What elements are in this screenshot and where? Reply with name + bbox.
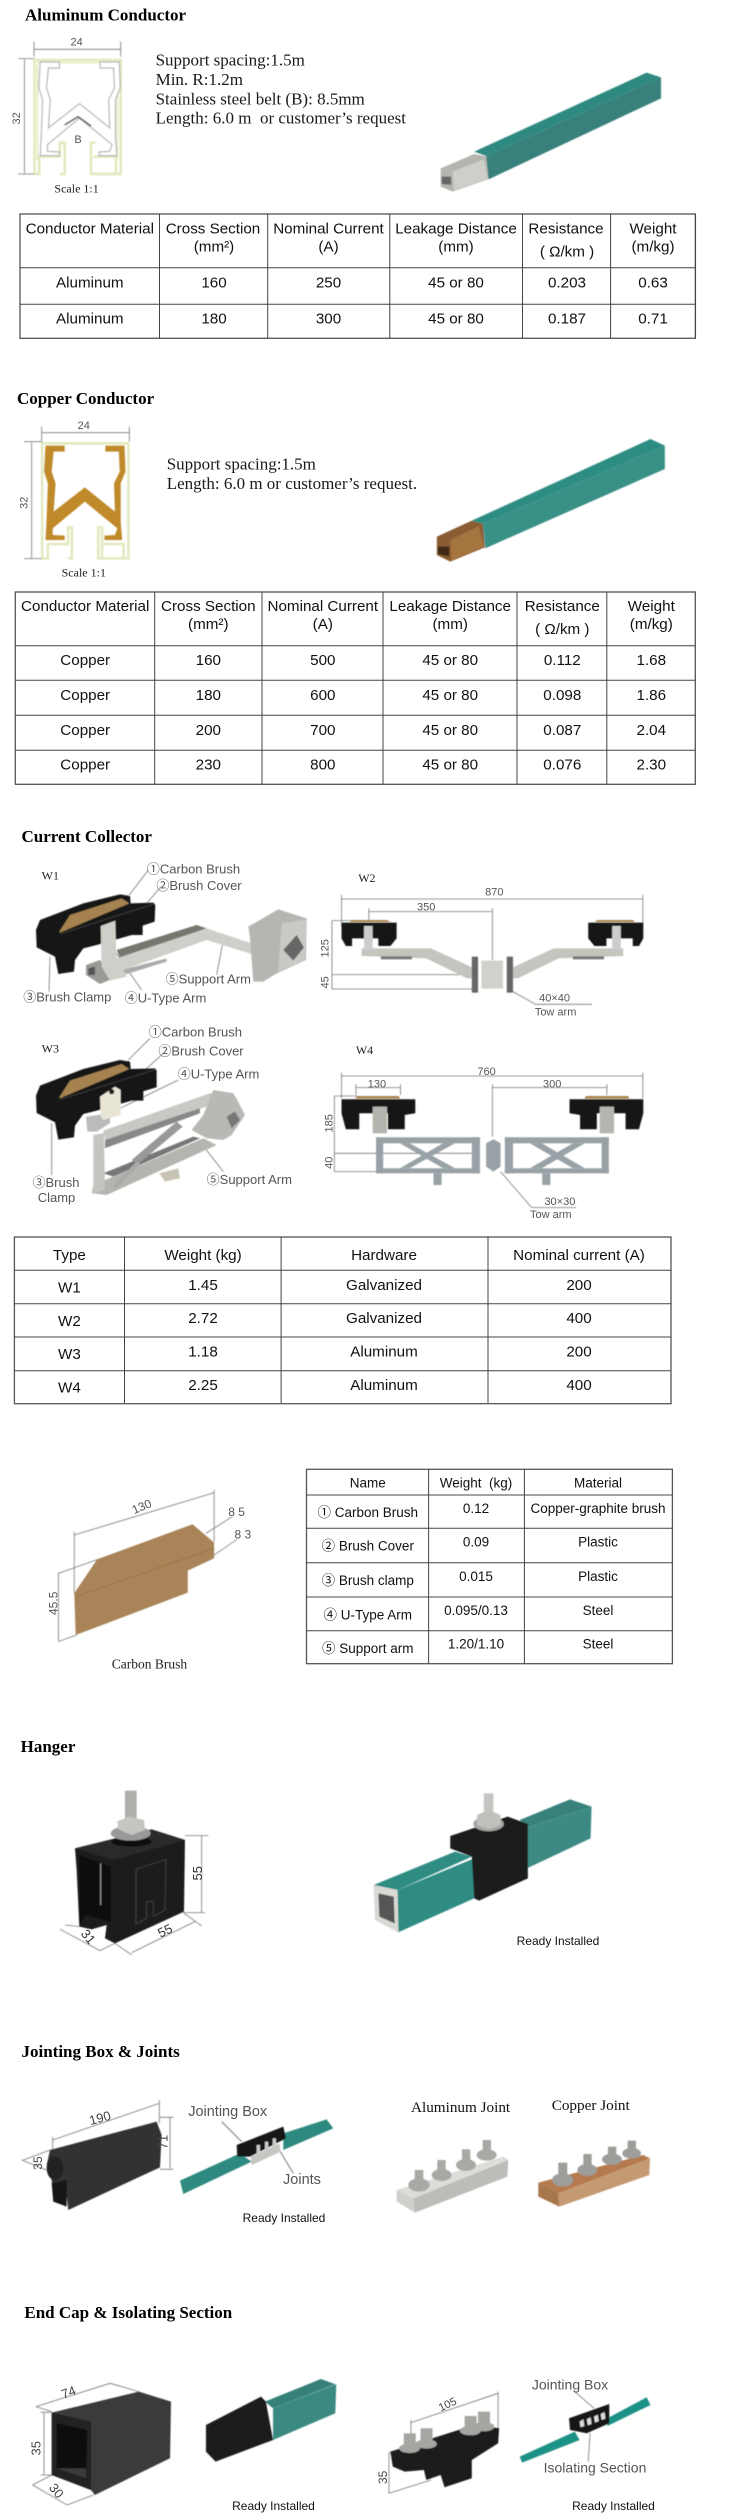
table: copper specifications: (mm) — [432, 616, 468, 633]
table: copper specifications: Copper — [60, 687, 110, 704]
table: copper specifications: 700 — [310, 722, 335, 739]
diagram: aluminum profile cross section: 24 — [70, 36, 83, 48]
table: aluminum specifications: (m/kg) — [631, 238, 675, 256]
table: collector types: W4 — [58, 1380, 81, 1396]
diagram: W1 collector: W1 — [42, 869, 59, 883]
image: isolating section installed: Isolating Section — [544, 2460, 646, 2476]
table: aluminum specifications: 300 — [316, 310, 341, 328]
table: collector types: W3 — [58, 1346, 81, 1363]
diagram: jointing box dimensions: 35 — [31, 2156, 45, 2170]
table: copper specifications: Copper — [60, 722, 110, 739]
table: copper specifications: Copper — [60, 756, 110, 774]
diagram: isolating section dimensions: 35 — [376, 2470, 390, 2484]
table: copper specifications: 2.30 — [637, 756, 666, 774]
diagram: W1 collector: ①Carbon Brush — [147, 862, 240, 876]
table: aluminum specifications: (mm²) — [194, 238, 234, 256]
table: aluminum specifications: Aluminum — [56, 310, 124, 328]
image: isolating section installed — [520, 2377, 655, 2513]
spec text: aluminum conductor: Stainless steel belt (B): 8.5mm — [156, 89, 365, 108]
heading: current collector: Current Collector — [22, 827, 152, 846]
table: aluminum specifications: 0.71 — [638, 310, 668, 328]
diagram: W4 collector dimensions: W4 — [356, 1043, 373, 1057]
table: aluminum specifications: Conductor Material — [26, 220, 154, 238]
diagram: W3 collector: W3 — [42, 1042, 59, 1056]
diagram: carbon brush: 130 — [130, 1496, 154, 1517]
table: aluminum specifications: Aluminum — [56, 274, 124, 292]
table: collector parts: ⑤ Support arm — [322, 1641, 414, 1656]
diagram: W2 collector dimensions: 350 — [417, 901, 435, 913]
diagram: hanger dimensions — [60, 1791, 208, 1955]
image: isolating section installed: Jointing Box — [532, 2377, 608, 2393]
section: jointing box and joints — [22, 2042, 650, 2225]
table: collector parts: ④ U-Type Arm — [324, 1608, 412, 1622]
table: collector types: 200 — [566, 1277, 592, 1294]
image: copper joint: Copper Joint — [552, 2097, 631, 2114]
table: aluminum specifications: 180 — [201, 310, 227, 328]
diagram: aluminum profile cross section: Scale 1:1 — [54, 181, 99, 195]
table: copper specifications: Resistance — [525, 598, 600, 615]
table: copper specifications: 45 or 80 — [422, 756, 478, 774]
diagram: W3 collector: ③Brush — [33, 1175, 79, 1190]
table: copper specifications: (A) — [313, 616, 333, 633]
diagram: aluminum profile cross section: B — [74, 134, 82, 146]
table: copper specifications — [15, 592, 695, 784]
diagram: end cap dimensions: 30 — [46, 2480, 67, 2501]
table: aluminum specifications: 250 — [316, 274, 341, 292]
table: aluminum specifications: ( Ω/km ) — [540, 244, 594, 260]
diagram: W4 collector dimensions: 760 — [477, 1066, 496, 1078]
table: copper specifications: Conductor Material — [21, 598, 149, 615]
diagram: isolating section dimensions: 105 — [437, 2396, 459, 2414]
table: collector parts: 1.20/1.10 — [448, 1636, 504, 1652]
table: copper specifications: 45 or 80 — [422, 722, 478, 739]
table: aluminum specifications: Resistance — [528, 220, 604, 238]
table: collector types: Type — [53, 1247, 86, 1264]
table: collector types: Weight (kg) — [164, 1247, 242, 1264]
table: collector types: W2 — [58, 1313, 81, 1330]
table: collector parts: ② Brush Cover — [322, 1538, 414, 1554]
diagram: W4 collector dimensions: 30×30 — [544, 1196, 575, 1208]
diagram: copper profile cross section: 24 — [78, 420, 90, 432]
diagram: copper profile cross section — [18, 420, 129, 579]
diagram: hanger dimensions: 55 — [155, 1921, 175, 1941]
table: aluminum specifications: 45 or 80 — [428, 274, 484, 292]
image: copper conductor bar — [437, 439, 665, 562]
table: collector types: W1 — [58, 1280, 81, 1296]
heading: jointing box and joints: Jointing Box & Joints — [22, 2042, 180, 2061]
image: jointing box installed: Joints — [283, 2172, 321, 2188]
table: copper specifications: Copper — [60, 652, 110, 669]
table: collector types: 200 — [566, 1344, 592, 1360]
diagram: W1 collector: ③Brush Clamp — [23, 990, 111, 1004]
table: copper specifications: (m/kg) — [630, 616, 673, 633]
image: aluminum joint — [397, 2099, 511, 2213]
table: collector types: Galvanized — [346, 1277, 422, 1294]
table: copper specifications: 45 or 80 — [422, 652, 478, 669]
diagram: carbon brush: 45.5 — [47, 1591, 61, 1615]
table: collector types: Hardware — [351, 1247, 417, 1264]
table: copper specifications: 1.68 — [637, 652, 666, 669]
table: collector parts: Steel — [583, 1603, 613, 1618]
table: copper specifications: 230 — [196, 756, 221, 774]
image: jointing box installed: Ready Installed — [243, 2211, 325, 2225]
table: copper specifications: Leakage Distance — [389, 598, 511, 615]
table: collector types: 2.72 — [188, 1310, 218, 1327]
table: collector types: 2.25 — [188, 1377, 218, 1394]
table: aluminum specifications: (mm) — [438, 238, 474, 256]
image: aluminum joint: Aluminum Joint — [411, 2099, 511, 2116]
diagram: carbon brush: Carbon Brush — [112, 1656, 187, 1672]
table: aluminum specifications: Nominal Current — [273, 220, 385, 238]
table: collector types: Galvanized — [346, 1310, 422, 1327]
table: aluminum specifications: 45 or 80 — [428, 310, 484, 328]
table: collector parts: Copper-graphite brush — [530, 1501, 666, 1516]
table: collector types: 400 — [566, 1310, 592, 1327]
diagram: W3 collector: ②Brush Cover — [158, 1044, 244, 1058]
table: copper specifications: 2.04 — [637, 722, 666, 739]
table: collector types — [14, 1237, 671, 1404]
diagram: end cap dimensions: 35 — [28, 2441, 44, 2456]
diagram: W3 collector: ⑤Support Arm — [207, 1172, 292, 1187]
diagram: aluminum profile cross section: 32 — [11, 112, 23, 124]
table: copper specifications: 1.86 — [637, 687, 666, 704]
table: copper specifications: 0.087 — [543, 722, 581, 739]
diagram: carbon brush: 8 3 — [234, 1527, 251, 1541]
table: copper specifications: 160 — [196, 652, 221, 669]
table: collector parts: 0.09 — [463, 1534, 489, 1550]
table: copper specifications: 180 — [196, 687, 221, 704]
table: collector parts: Plastic — [578, 1534, 618, 1550]
image: jointing box installed — [180, 2104, 333, 2225]
table: collector types: Nominal current (A) — [513, 1247, 645, 1264]
table: collector parts: 0.095/0.13 — [444, 1603, 508, 1618]
diagram: W3 collector: Clamp — [38, 1190, 75, 1205]
table: collector types: 1.45 — [188, 1277, 218, 1294]
table: copper specifications: Cross Section — [161, 598, 256, 615]
diagram: end cap dimensions: 74 — [59, 2383, 78, 2402]
table: copper specifications: ( Ω/km ) — [535, 621, 589, 638]
diagram: end cap dimensions — [28, 2383, 171, 2505]
diagram: W3 collector: ④U-Type Arm — [178, 1066, 259, 1082]
table: copper specifications: 0.098 — [543, 687, 581, 704]
table: copper specifications: 800 — [310, 756, 335, 774]
section: copper conductor — [15, 389, 695, 784]
heading: hanger: Hanger — [21, 1737, 76, 1756]
table: collector parts: Weight (kg) — [440, 1475, 512, 1490]
diagram: W1 collector: ⑤Support Arm — [166, 972, 251, 986]
image: aluminum conductor bar — [441, 73, 661, 192]
diagram: W2 collector dimensions: 125 — [320, 939, 332, 957]
diagram: copper profile cross section: 32 — [18, 497, 30, 509]
diagram: W1 collector: ②Brush Cover — [156, 878, 242, 893]
table: copper specifications: 200 — [196, 722, 221, 739]
table: copper specifications: 600 — [310, 687, 335, 704]
diagram: isolating section dimensions — [376, 2392, 499, 2493]
table: copper specifications: 0.112 — [544, 652, 581, 669]
section: current collector — [14, 827, 671, 1404]
table: copper specifications: 45 or 80 — [422, 687, 478, 704]
diagram: jointing box dimensions: 190 — [88, 2108, 112, 2128]
image: jointing box installed: Jointing Box — [188, 2104, 268, 2120]
image: hanger installed on bar: Ready Installed — [517, 1934, 599, 1948]
spec text: copper conductor: Support spacing:1.5m — [167, 454, 316, 474]
diagram: W3 collector: ①Carbon Brush — [149, 1024, 242, 1040]
heading: copper conductor: Copper Conductor — [17, 389, 155, 408]
spec text: copper conductor: Length: 6.0 m or customer’s request. — [167, 474, 417, 493]
image: isolating section installed: Ready Installed — [572, 2499, 655, 2513]
section: hanger — [21, 1737, 599, 1955]
diagram: carbon brush: 8 5 — [228, 1505, 245, 1519]
table: collector parts: 0.015 — [459, 1569, 493, 1584]
diagram: jointing box dimensions — [22, 2100, 173, 2210]
table: collector parts: Plastic — [578, 1569, 618, 1584]
heading: aluminum conductor: Aluminum Conductor — [25, 6, 187, 24]
table: collector parts: Steel — [583, 1636, 613, 1652]
table: aluminum specifications: 0.203 — [548, 274, 586, 292]
diagram: copper profile cross section: Scale 1:1 — [62, 565, 106, 579]
table: copper specifications: Nominal Current — [268, 598, 379, 615]
table: aluminum specifications: 160 — [201, 274, 227, 292]
diagram: carbon brush — [47, 1490, 251, 1672]
table: aluminum specifications: 0.187 — [548, 310, 586, 328]
table: collector parts: ① Carbon Brush — [318, 1505, 418, 1520]
table: aluminum specifications — [20, 214, 695, 338]
table: collector parts — [306, 1469, 672, 1664]
diagram: W4 collector dimensions: 300 — [543, 1078, 561, 1090]
diagram: aluminum profile cross section — [11, 36, 121, 195]
table: collector types: Aluminum — [350, 1344, 418, 1360]
table: collector types: 400 — [566, 1377, 592, 1394]
table: collector types: 1.18 — [188, 1344, 218, 1360]
image: hanger installed on bar — [374, 1793, 599, 1948]
diagram: W4 collector dimensions: 130 — [368, 1078, 386, 1090]
table: collector parts: Material — [574, 1475, 622, 1490]
table: collector parts: 0.12 — [463, 1501, 489, 1516]
diagram: W4 collector dimensions — [324, 1043, 643, 1221]
diagram: W2 collector dimensions: 40×40 — [539, 993, 570, 1005]
table: copper specifications: 0.076 — [543, 756, 581, 774]
diagram: W4 collector dimensions: Tow arm — [530, 1209, 572, 1221]
table: copper specifications: Weight — [628, 598, 676, 615]
heading: end cap and isolating section: End Cap & Isolating Section — [24, 2303, 233, 2322]
image: end cap installed: Ready Installed — [232, 2499, 315, 2513]
table: aluminum specifications: (A) — [318, 238, 339, 256]
table: copper specifications: (mm²) — [188, 616, 229, 633]
diagram: hanger dimensions: 31 — [78, 1926, 99, 1947]
spec text: copper conductor — [167, 454, 417, 493]
table: aluminum specifications: Leakage Distance — [395, 220, 517, 238]
diagram: W2 collector dimensions: 870 — [485, 887, 503, 899]
table: collector types: Aluminum — [350, 1377, 418, 1394]
diagram: jointing box dimensions: 71 — [156, 2135, 170, 2149]
diagram: W1 collector — [23, 862, 307, 1006]
table: collector parts: Name — [350, 1475, 386, 1490]
diagram: W2 collector dimensions: 45 — [320, 976, 332, 988]
section: end cap and isolating section — [24, 2303, 655, 2513]
spec text: aluminum conductor: Min. R:1.2m — [156, 70, 243, 89]
diagram: W2 collector dimensions: W2 — [358, 871, 376, 885]
table: aluminum specifications: Weight — [630, 220, 677, 238]
table: aluminum specifications: 0.63 — [638, 274, 668, 292]
image: end cap installed — [206, 2379, 336, 2513]
table: copper specifications: 500 — [310, 652, 335, 669]
image: copper joint — [538, 2097, 650, 2207]
diagram: W4 collector dimensions: 185 — [324, 1114, 336, 1132]
diagram: W4 collector dimensions: 40 — [324, 1157, 336, 1169]
spec text: aluminum conductor — [156, 50, 406, 128]
diagram: W2 collector dimensions — [320, 871, 643, 1019]
diagram: W2 collector dimensions: Tow arm — [535, 1007, 576, 1019]
diagram: W3 collector — [33, 1024, 292, 1205]
diagram: hanger dimensions: 55 — [190, 1866, 205, 1881]
spec text: aluminum conductor: Support spacing:1.5m — [156, 50, 305, 70]
section: aluminum conductor — [11, 6, 695, 338]
section: carbon brush — [47, 1469, 672, 1672]
table: collector parts: ③ Brush clamp — [322, 1573, 414, 1588]
diagram: W1 collector: ④U-Type Arm — [125, 990, 206, 1006]
spec text: aluminum conductor: Length: 6.0 m or customer’s request — [156, 109, 406, 128]
table: aluminum specifications: Cross Section — [166, 220, 260, 238]
